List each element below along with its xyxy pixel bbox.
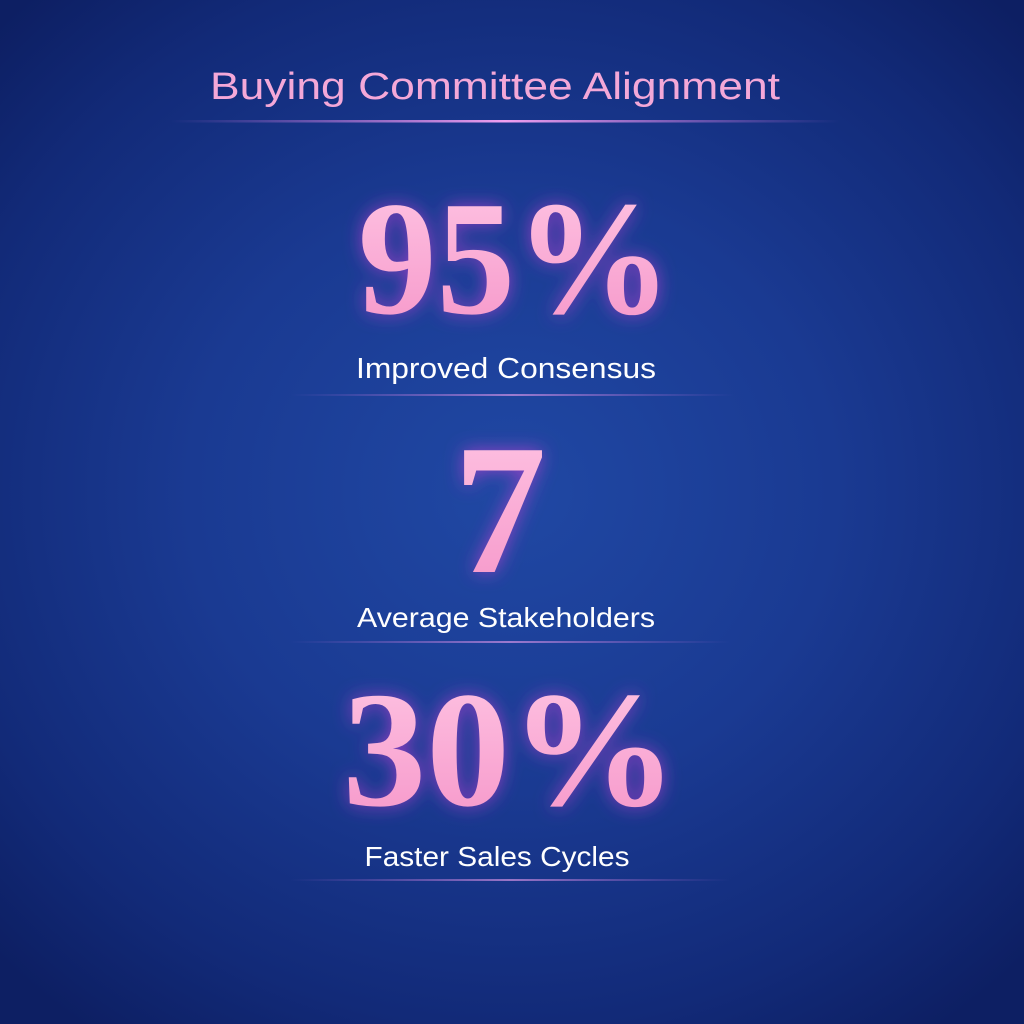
label: Improved Consensus: Improved Consensus <box>356 353 656 385</box>
label: Average Stakeholders: Average Stakeholders <box>357 602 655 633</box>
number: 7: 7 <box>454 407 546 613</box>
number: 30%: 30% <box>342 658 678 841</box>
title: Buying Committee Alignment <box>210 66 781 108</box>
number: 95%: 95% <box>358 169 672 349</box>
stat: 7 <box>357 407 655 633</box>
label: Faster Sales Cycles: Faster Sales Cycles <box>364 841 630 872</box>
stat: 30% <box>342 658 678 872</box>
stat: 95% <box>356 169 672 385</box>
